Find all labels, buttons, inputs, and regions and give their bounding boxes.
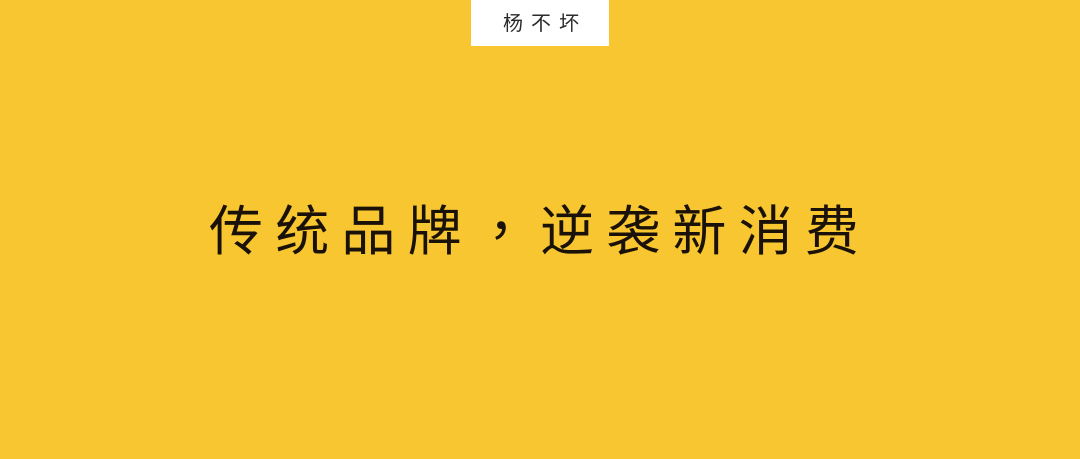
author tag xyxy=(471,0,609,46)
author name: 杨不坏 xyxy=(503,13,587,35)
title: 传统品牌，逆袭新消费 xyxy=(209,202,871,262)
